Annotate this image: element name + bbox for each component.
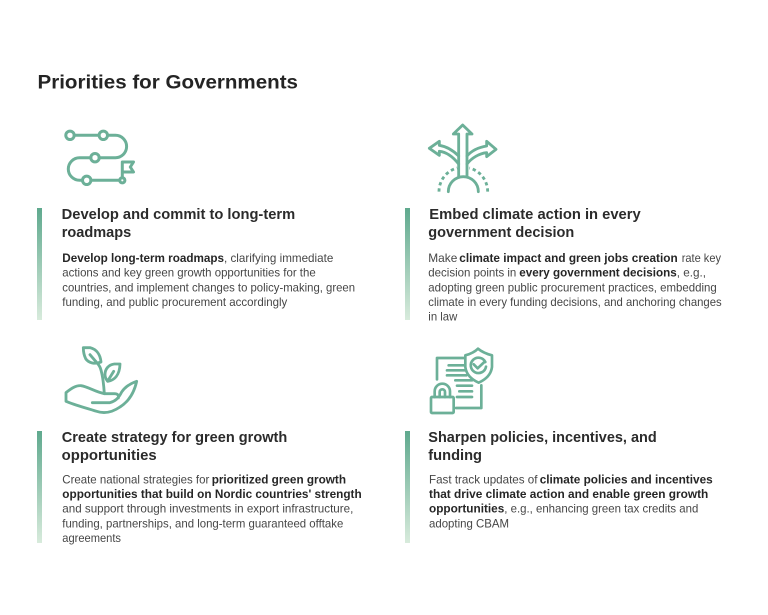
panel: roadmaps — [37, 131, 355, 320]
body text: adopting CBAM — [429, 516, 509, 530]
body text: rate key — [682, 251, 721, 265]
body text: every government decisions — [519, 266, 677, 280]
body text: decision points in — [428, 266, 516, 280]
body text: , e.g., enhancing green tax credits and — [504, 502, 698, 516]
body text: in law — [428, 310, 458, 324]
body text: countries, and implement changes to policy-making, green — [62, 280, 355, 294]
panel: green growth strategy — [37, 348, 362, 545]
icon: document with shield and lock — [431, 349, 492, 413]
title: Priorities for Governments — [38, 72, 298, 94]
body text — [62, 251, 355, 309]
heading: Embed climate action in every — [429, 207, 642, 223]
body text: adopting green public procurement practices, embedding — [428, 280, 717, 294]
heading — [428, 430, 657, 464]
heading: government decision — [428, 225, 574, 241]
heading: funding — [428, 448, 482, 464]
body text: Create national strategies for — [62, 472, 209, 486]
body text: , e.g., — [677, 266, 706, 280]
icon: roadmap with flag — [66, 131, 134, 184]
body text: and support through investments in export infrastructure, — [62, 502, 353, 516]
heading: opportunities — [62, 448, 157, 464]
accent bar — [405, 431, 410, 543]
body text: that drive climate action and enable green growth — [429, 487, 708, 501]
heading — [62, 430, 287, 464]
heading: Sharpen policies, incentives, and — [428, 430, 657, 446]
accent bar — [37, 208, 42, 320]
icon: hand holding seedling — [66, 348, 137, 412]
heading: roadmaps — [62, 225, 131, 241]
accent bar — [405, 208, 410, 320]
body text: Make — [428, 251, 458, 265]
accent bar — [37, 431, 42, 543]
body text — [62, 472, 362, 545]
body text: funding, and public procurement accordingly — [62, 295, 287, 309]
panel: policies and funding — [405, 349, 713, 543]
body text — [429, 472, 713, 530]
body text: opportunities — [429, 502, 505, 516]
body text: climate in every funding decisions, and anchoring changes — [428, 295, 722, 309]
body text: Develop long-term roadmaps — [62, 251, 224, 265]
heading: Create strategy for green growth — [62, 430, 287, 446]
heading — [428, 207, 642, 241]
body text — [428, 251, 722, 324]
body text: opportunities that build on Nordic countries' strength — [62, 487, 362, 501]
body text: climate policies and incentives — [540, 472, 713, 486]
heading — [62, 207, 295, 241]
body text: actions and key green growth opportunities for the — [62, 266, 316, 280]
icon: branching arrows — [429, 125, 496, 192]
body text: prioritized green growth — [212, 472, 346, 486]
body text: Fast track updates of — [429, 472, 538, 486]
heading: Develop and commit to long-term — [62, 207, 295, 223]
body text: , clarifying immediate — [224, 251, 334, 265]
body text: climate impact and green jobs creation — [459, 251, 678, 265]
body text: agreements — [62, 531, 121, 545]
panel: climate action — [405, 125, 722, 324]
body text: funding, partnerships, and long-term guaranteed offtake — [62, 516, 344, 530]
